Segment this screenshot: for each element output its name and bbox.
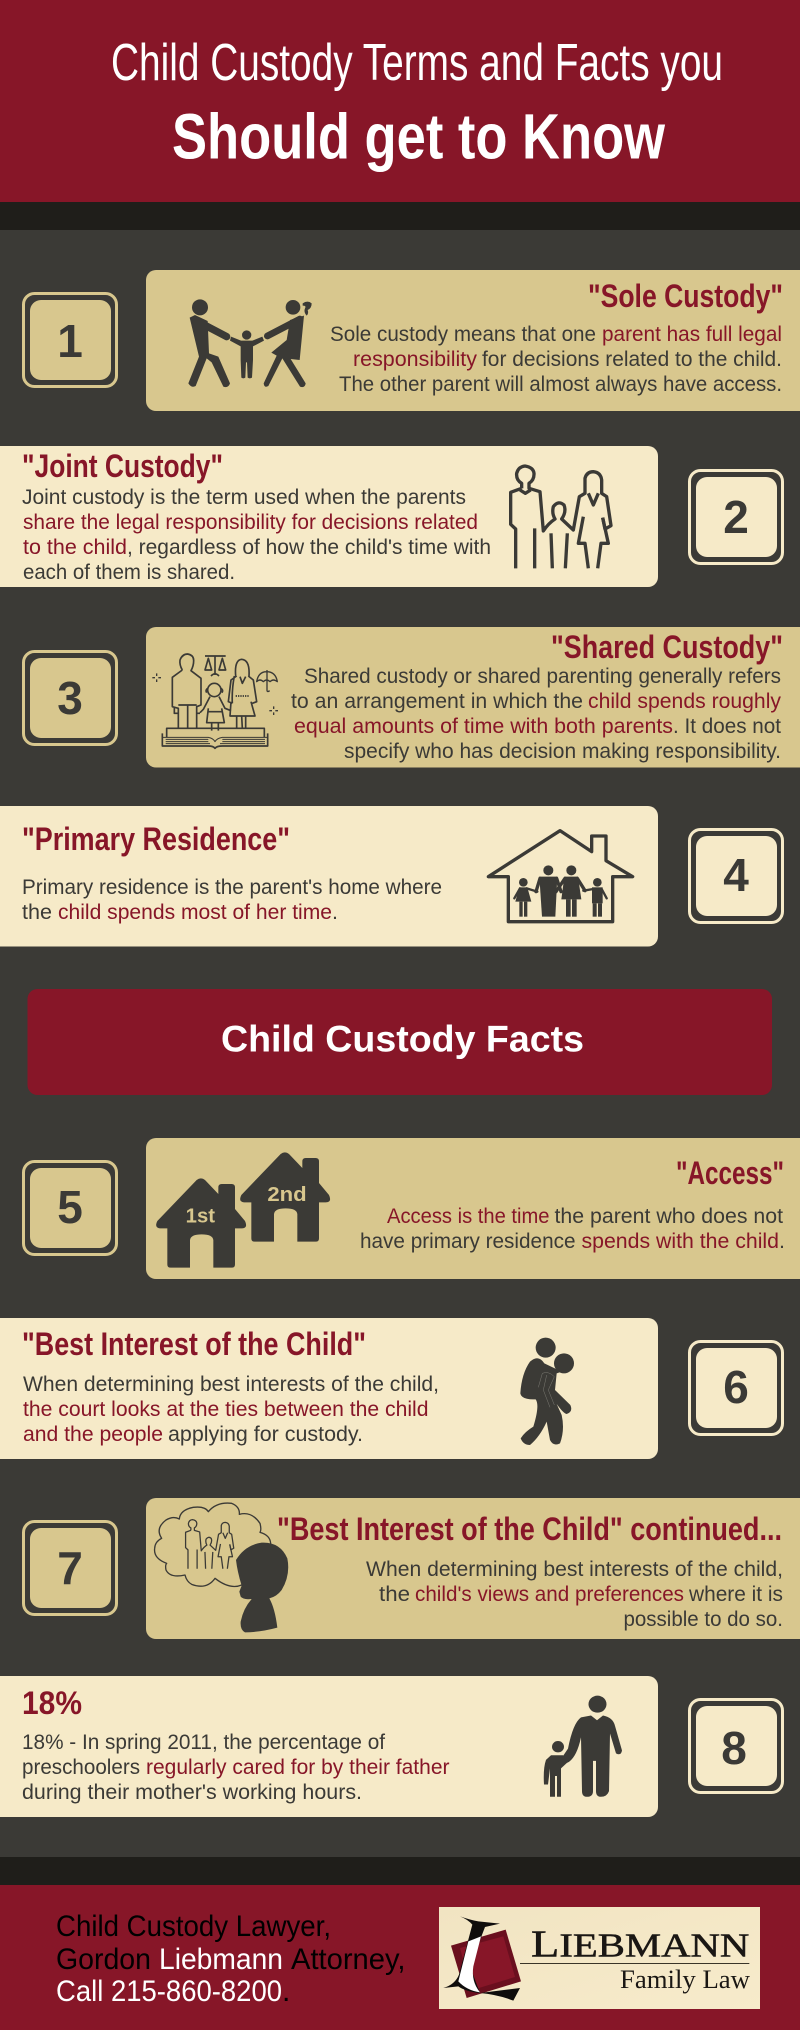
body text: equal amounts of time with both parents: [294, 714, 673, 738]
number badge 2: [690, 470, 782, 564]
body text: [23, 1372, 439, 1446]
number badge 5: 5: [57, 1181, 83, 1233]
number badge 3: 3: [57, 672, 83, 724]
panel: joint custody: [0, 446, 658, 587]
logo: Liebmann Family Law: Family Law: [620, 1965, 750, 1994]
body text: the: [22, 900, 52, 924]
title line 2: Should get to Know: [172, 100, 665, 172]
body text: The other parent will almost always have access.: [339, 372, 782, 396]
body text: [360, 1204, 785, 1253]
body text: 18% - In spring 2011, the percentage of: [22, 1730, 385, 1754]
section banner: child custody facts: [28, 989, 772, 1095]
number badge 1: 1: [57, 315, 83, 367]
contact text: Child Custody Lawyer,: [56, 1910, 331, 1943]
body text: the court looks at the ties between the child: [23, 1397, 428, 1421]
number badge 4: 4: [723, 849, 749, 901]
body text: child spends most of her time: [58, 900, 332, 924]
body text: specify who has decision making responsibility.: [344, 739, 781, 763]
body text: Joint custody is the term used when the parents: [22, 485, 466, 509]
body text: child's views and preferences: [415, 1582, 684, 1606]
body text: When determining best interests of the child,: [23, 1372, 439, 1396]
panel: primary residence: [0, 806, 658, 946]
contact text: Call 215-860-8200: [56, 1975, 282, 2008]
footer band: [0, 1885, 800, 2030]
panel: shared custody: [146, 627, 800, 768]
header banner with title: [0, 0, 800, 202]
icon: father holding child's hand: [544, 1696, 622, 1797]
icon: parents pulling child: [188, 299, 312, 387]
icon: parent carrying child: [520, 1338, 574, 1445]
number badge 7: [24, 1522, 116, 1614]
heading: "Joint Custody": [22, 448, 223, 484]
body text: responsibility: [353, 347, 477, 371]
panel: best interest of the child: [0, 1318, 658, 1459]
contact text: Liebmann: [159, 1943, 283, 1976]
heading: "Primary Residence": [22, 821, 290, 857]
icon: first and second homes: [156, 1152, 330, 1268]
body text: [291, 664, 781, 763]
heading: 18%: [22, 1685, 82, 1721]
section banner: child custody facts: Child Custody Facts: [221, 1018, 584, 1060]
body text: to the child: [23, 535, 127, 559]
body text: applying for custody.: [168, 1422, 363, 1446]
body text: [366, 1557, 783, 1631]
body text: . It does not: [673, 714, 781, 738]
number badge 5: [24, 1162, 116, 1254]
contact text: .: [282, 1975, 290, 2008]
logo: Liebmann Family Law: LIEBMANN: [531, 1923, 749, 1965]
panel: best interest continued: [146, 1498, 800, 1639]
number badge 2: 2: [723, 491, 749, 543]
contact text: Attorney,: [291, 1943, 406, 1976]
body text: during their mother's working hours.: [22, 1780, 362, 1804]
number badge 4: [690, 830, 782, 922]
body text: possible to do so.: [624, 1607, 783, 1631]
body text: Shared custody or shared parenting generally refers: [304, 664, 781, 688]
body text: [22, 875, 442, 924]
number badge 7: 7: [57, 1542, 83, 1594]
body text: to an arrangement in which the: [291, 689, 583, 713]
icon: first and second homes: 1st: [186, 1206, 215, 1228]
body text: [22, 485, 491, 584]
body text: and the people: [23, 1422, 163, 1446]
icon: family outline: [511, 466, 611, 568]
icon: child thinking of family: [155, 1503, 288, 1632]
body text: the: [379, 1582, 410, 1606]
body text: for decisions related to the child.: [482, 347, 782, 371]
icon: family on book: [152, 654, 278, 748]
number badge 6: [690, 1342, 782, 1434]
body text: [330, 322, 782, 396]
body text: Primary residence is the parent's home where: [22, 875, 442, 899]
body text: , regardless of how the child's time with: [127, 535, 491, 559]
body text: .: [332, 900, 338, 924]
number badge 6: 6: [723, 1361, 749, 1413]
body text: have primary residence: [360, 1229, 576, 1253]
body text: Access is the time: [387, 1204, 550, 1228]
body text: parent has full legal: [602, 322, 782, 346]
heading: "Best Interest of the Child": [22, 1326, 366, 1362]
body text: regularly cared for by their father: [146, 1755, 450, 1779]
contact text: Gordon: [56, 1943, 151, 1976]
body text: child spends roughly: [588, 689, 781, 713]
number badge 3: [24, 652, 116, 744]
body text: .: [779, 1229, 785, 1253]
contact text: [56, 1910, 406, 2008]
body text: each of them is shared.: [23, 560, 235, 584]
number badge 8: 8: [721, 1722, 747, 1774]
body text: When determining best interests of the child,: [366, 1557, 783, 1581]
panel: access: [146, 1138, 800, 1279]
body text: where it is: [688, 1582, 783, 1606]
panel: sole custody: [146, 270, 800, 411]
body text: the parent who does not: [554, 1204, 783, 1228]
icon: family in house: [488, 831, 633, 922]
icon: first and second homes: 2nd: [267, 1184, 307, 1206]
body text: preschoolers: [22, 1755, 140, 1779]
panel: 18 percent statistic: [0, 1676, 658, 1817]
body text: [22, 1730, 450, 1804]
body text: spends with the child: [582, 1229, 779, 1253]
number badge 8: [690, 1700, 782, 1792]
number badge 1: [24, 294, 116, 386]
body text: Sole custody means that one: [330, 322, 596, 346]
body text: share the legal responsibility for decisions related: [23, 510, 478, 534]
logo: Liebmann Family Law: [439, 1907, 760, 2009]
